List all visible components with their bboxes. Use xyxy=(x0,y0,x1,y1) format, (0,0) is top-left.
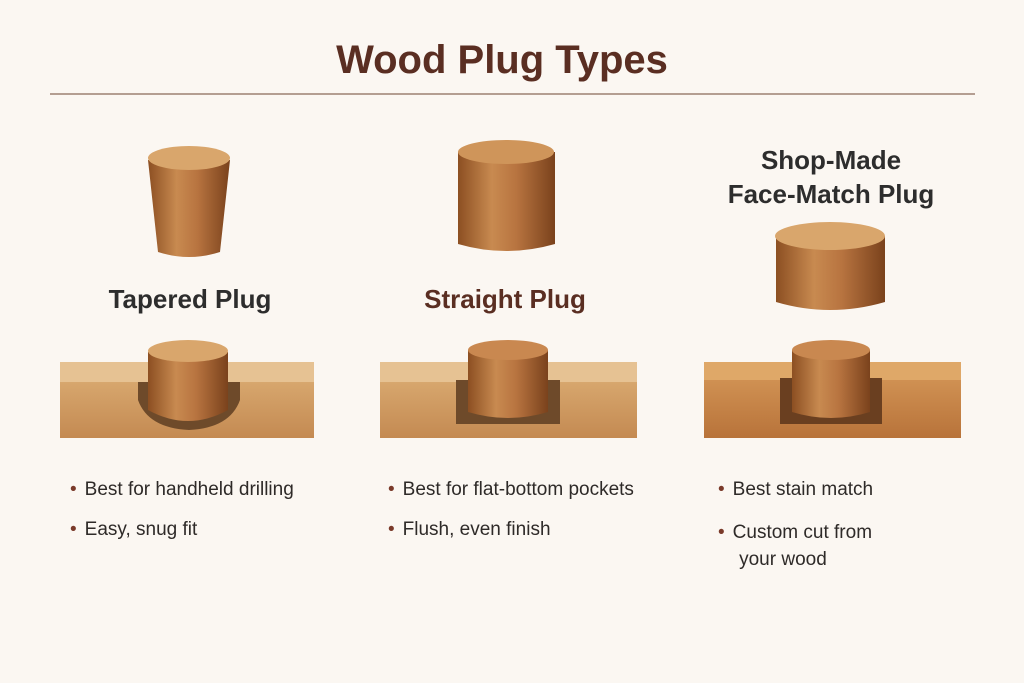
text: • Flush, even finish xyxy=(388,519,551,540)
text: • Easy, snug fit xyxy=(70,519,197,540)
board 1 xyxy=(60,340,314,438)
text: • Best stain match xyxy=(718,479,873,500)
title: Wood Plug Types xyxy=(336,38,668,82)
board 2 xyxy=(380,340,637,438)
icon: tapered plug xyxy=(148,146,230,257)
icon: straight plug xyxy=(458,140,555,251)
text: • Custom cut from xyxy=(718,522,872,543)
text: • Best for flat-bottom pockets xyxy=(388,479,634,500)
label: face-match: Face-Match Plug xyxy=(728,179,934,209)
board 3 xyxy=(704,340,961,438)
bullets col1 xyxy=(70,479,294,540)
text: • Best for handheld drilling xyxy=(70,479,294,500)
label: straight: Straight Plug xyxy=(424,284,586,314)
label: face-match xyxy=(728,145,934,209)
label: tapered: Tapered Plug xyxy=(109,284,271,314)
bullets col2 xyxy=(388,479,634,540)
icon: face-match plug xyxy=(775,222,885,310)
label: face-match: Shop-Made xyxy=(761,145,901,175)
bullets col3 xyxy=(718,479,873,570)
text: your wood xyxy=(739,549,827,570)
